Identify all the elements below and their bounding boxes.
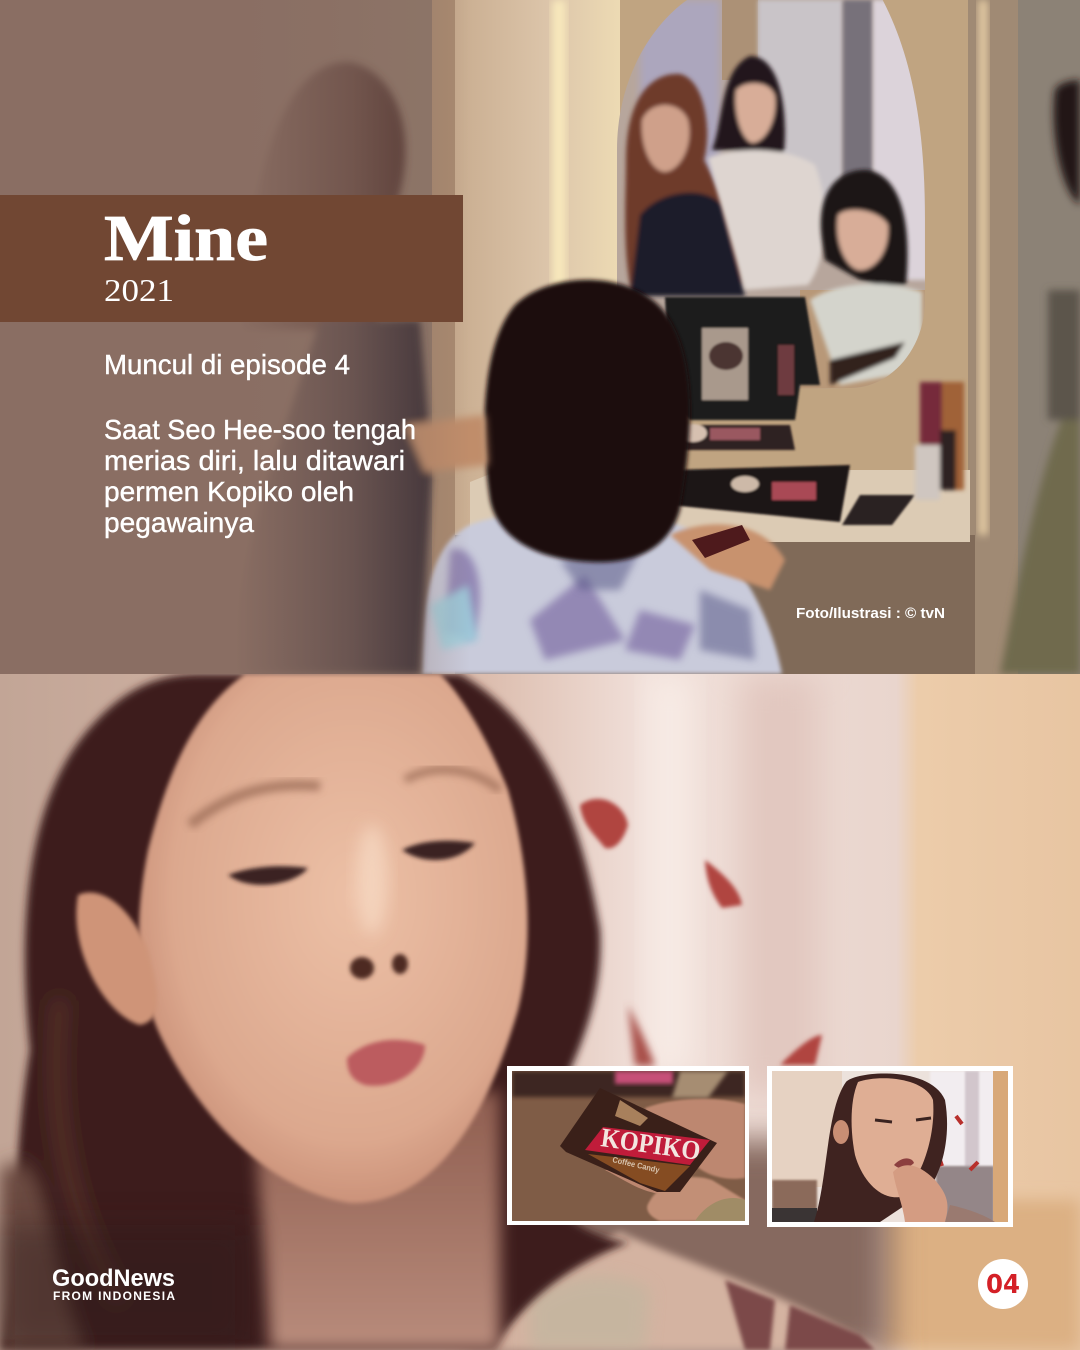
photo credit: Foto/Ilustrasi : © tvN (796, 605, 945, 622)
right edge figures (1000, 80, 1080, 674)
cosmetics bottles (915, 382, 964, 500)
hands (645, 1099, 745, 1179)
thumbnail: woman eating (767, 1066, 1013, 1227)
bottom photo: woman eating candy (0, 674, 1080, 1350)
blurred curtain and petals (580, 674, 1080, 1350)
makeup box (665, 297, 915, 525)
description text (104, 414, 416, 538)
top photo: dressing room scene (264, 0, 1080, 674)
neck (255, 1090, 500, 1350)
lower shadow and blouse (470, 1140, 890, 1350)
ear (76, 892, 157, 1025)
title: Mine (104, 202, 268, 275)
nostrils (350, 957, 374, 979)
description text: merias diri, lalu ditawari (104, 445, 405, 476)
year: 2021 (104, 272, 174, 308)
bottom shade under logo (0, 1225, 250, 1350)
reflected seated woman (810, 170, 922, 385)
page number badge: 04 (986, 1270, 1020, 1300)
room walls and mirror frame (432, 0, 1080, 674)
woman silhouette behind left overlay (263, 60, 494, 674)
mirror with reflection (610, 0, 930, 400)
thumbnail: Kopiko candy pack: Coffee Candy (612, 1155, 661, 1175)
description text: Saat Seo Hee-soo tengah (104, 414, 416, 445)
title band (0, 195, 463, 322)
page number badge (978, 1259, 1028, 1309)
logo: GoodNews from Indonesia: FROM INDONESIA (53, 1289, 175, 1303)
episode line: Muncul di episode 4 (104, 349, 350, 380)
description text: pegawainya (104, 507, 254, 538)
thumbnail: Kopiko candy pack: KOPIKO (599, 1122, 702, 1166)
face (76, 674, 528, 1203)
left colour overlay (217, 60, 458, 674)
candy pack (560, 1088, 717, 1192)
hair back (0, 674, 630, 1350)
thumbnail: Kopiko candy pack (507, 1066, 749, 1225)
logo: GoodNews from Indonesia: GoodNews (52, 1265, 175, 1292)
description text: permen Kopiko oleh (104, 476, 354, 507)
lips (347, 1040, 425, 1086)
reflected woman middle (708, 56, 825, 290)
reflected woman left (625, 74, 745, 296)
foreground woman with dark hair (422, 280, 785, 674)
nose highlight and eyes (356, 825, 388, 935)
